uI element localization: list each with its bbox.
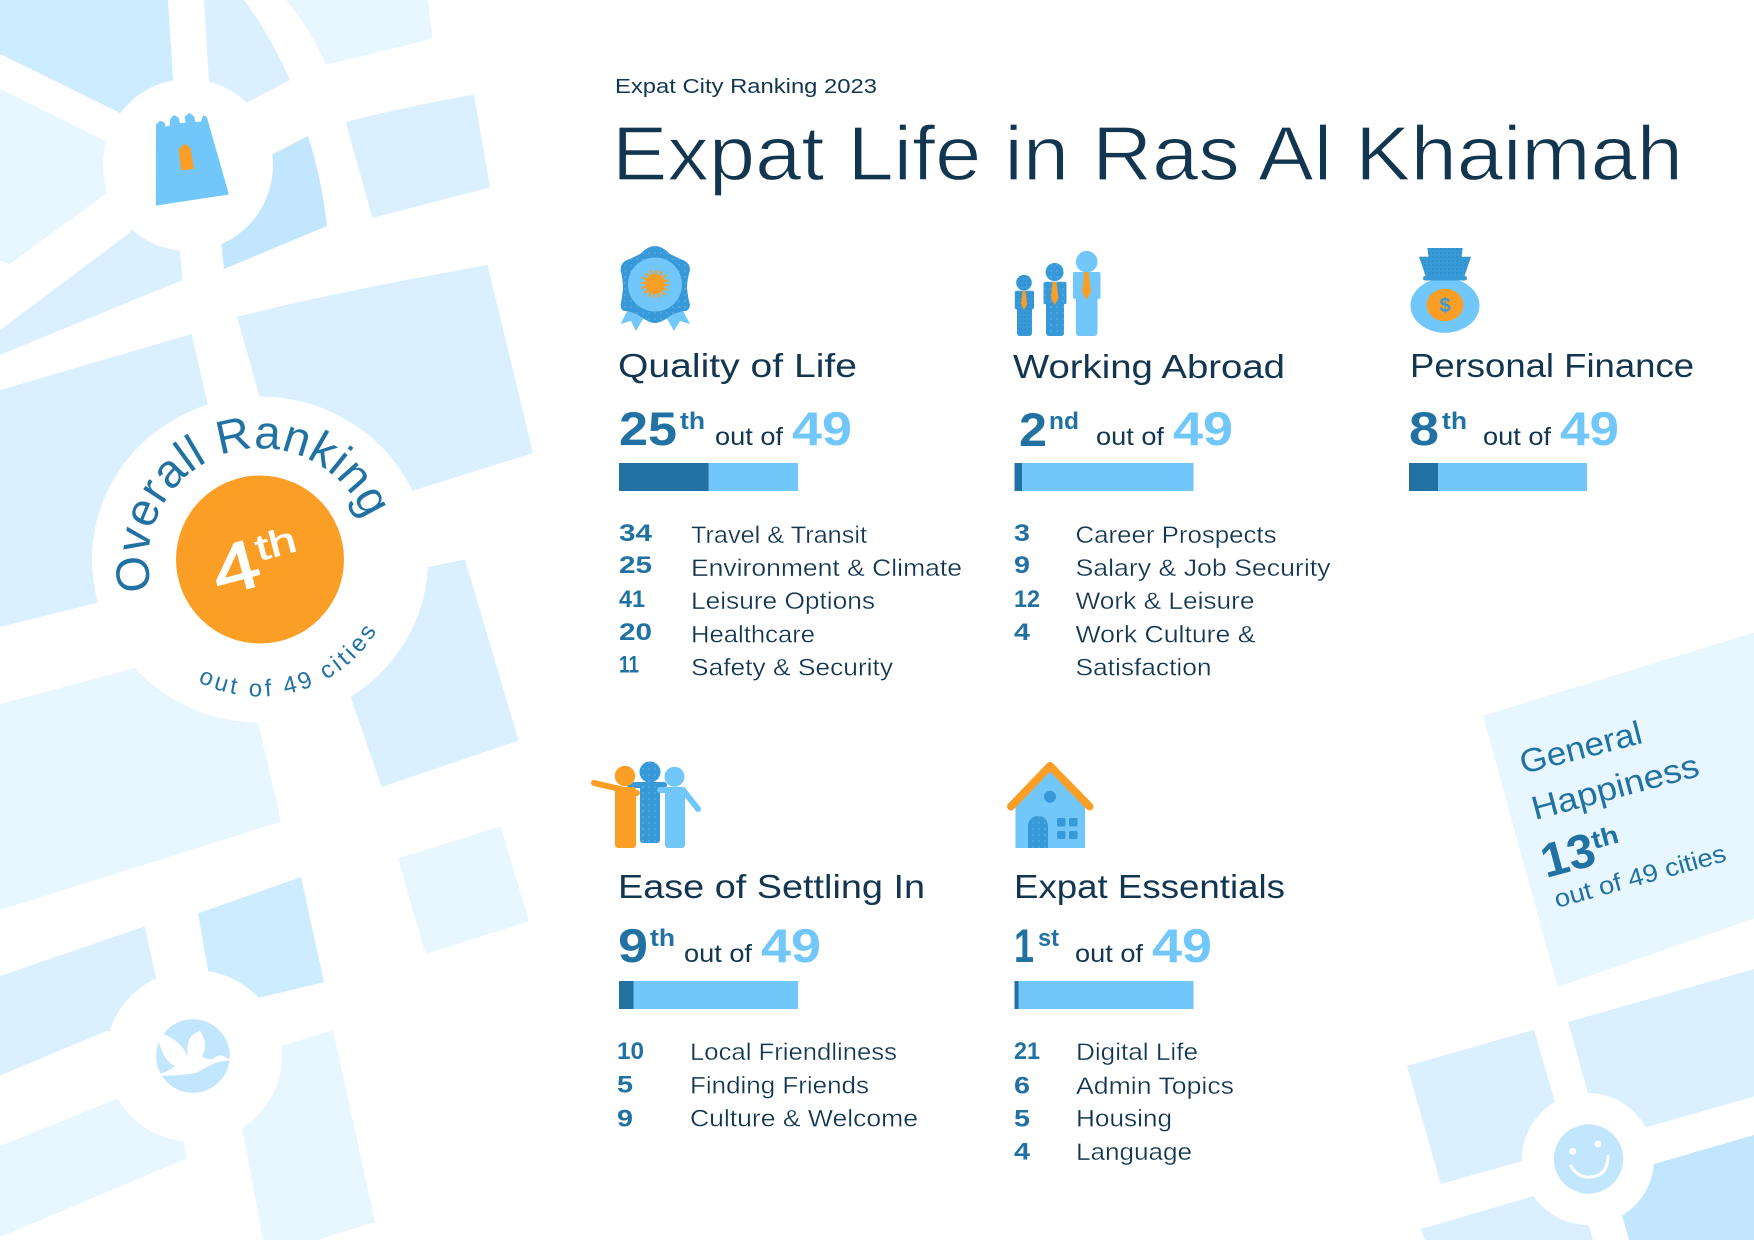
- rank: 9th out of 49: out of: [684, 940, 752, 968]
- sub-rankings list: Work Culture &: [1076, 622, 1256, 648]
- sub-rankings list: Career Prospects: [1076, 522, 1276, 549]
- panel: expat essentials: [1011, 766, 1285, 1166]
- callout: general happiness: Happiness: [1527, 747, 1703, 827]
- rank: 1st out of 49: 1: [1014, 919, 1034, 972]
- icon: smiley face: [1554, 1124, 1623, 1194]
- heading: Ease of Settling In: [618, 868, 925, 905]
- rank: 8th out of 49: [1409, 402, 1619, 455]
- progress bar: [619, 463, 798, 491]
- rank: 9th out of 49: th: [650, 925, 675, 952]
- rank: 2nd out of 49: 2: [1019, 403, 1047, 456]
- panel: quality of life: [618, 246, 962, 682]
- curved caption: out of 49 cities: out of 49 cities: [200, 626, 375, 697]
- sub-rankings list: Salary & Job Security: [1076, 555, 1330, 582]
- rank: 1st out of 49: [1014, 919, 1212, 972]
- sub-rankings list: Finding Friends: [690, 1072, 869, 1100]
- sub-rankings list: 5: [617, 1072, 633, 1098]
- callout: general happiness: 13: [1535, 823, 1601, 889]
- sub-rankings list: 20: [619, 619, 652, 646]
- callout: overall ranking badge: [116, 418, 386, 697]
- sub-rankings list: 4: [1014, 619, 1031, 646]
- heading: Expat Essentials: [1014, 868, 1285, 905]
- icon: house: [1011, 766, 1090, 848]
- sub-rankings list: Leisure Options: [691, 588, 875, 615]
- sub-rankings list: Safety & Security: [691, 654, 893, 682]
- progress bar: [1409, 463, 1587, 491]
- rank: 2nd out of 49: nd: [1049, 408, 1079, 435]
- sub-rankings list: Language: [1076, 1139, 1192, 1166]
- rank: 1st out of 49: st: [1038, 925, 1059, 952]
- sub-rankings list: 34: [619, 520, 653, 547]
- sub-rankings list: 3: [1014, 520, 1030, 547]
- sub-rankings list: 12: [1014, 586, 1040, 613]
- sub-rankings list: [1014, 1038, 1234, 1166]
- orange rank circle: th: [250, 519, 301, 569]
- callout: general happiness: out of 49 cities: [1551, 839, 1729, 914]
- sub-rankings list: Travel & Transit: [691, 522, 867, 549]
- sub-rankings list: [1014, 520, 1330, 682]
- sub-rankings list: Local Friendliness: [690, 1039, 897, 1066]
- icon: three business people: [1015, 251, 1100, 336]
- icon: three friends: [594, 762, 698, 848]
- sub-rankings list: 10: [617, 1038, 644, 1065]
- progress bar: [1014, 981, 1194, 1009]
- panel: working abroad: [1013, 251, 1330, 681]
- sub-rankings list: 4: [1014, 1138, 1031, 1166]
- heading: Personal Finance: [1410, 347, 1694, 384]
- sub-rankings list: Admin Topics: [1076, 1073, 1234, 1100]
- sub-rankings list: 9: [1014, 552, 1030, 579]
- sub-rankings list: [617, 1038, 918, 1132]
- sub-rankings list: Housing: [1076, 1106, 1172, 1132]
- icon: rosette: [621, 246, 690, 331]
- rank: 1st out of 49: 49: [1152, 919, 1212, 972]
- rank: 2nd out of 49: [1019, 402, 1233, 456]
- curved heading: overall ranking: Overall Ranking: [116, 418, 386, 590]
- rank: 25th out of 49: 25: [619, 402, 677, 455]
- sub-rankings list: Satisfaction: [1076, 654, 1212, 682]
- rank: 9th out of 49: 9: [618, 919, 648, 972]
- title: Expat Life in Ras Al Khaimah: [612, 111, 1683, 197]
- rank: 25th out of 49: 49: [792, 402, 852, 455]
- rank: 8th out of 49: th: [1442, 408, 1467, 435]
- icon: money bag: [1410, 248, 1480, 333]
- rank: 2nd out of 49: 49: [1173, 402, 1233, 455]
- callout: general happiness: General: [1515, 714, 1646, 781]
- sub-rankings list: Healthcare: [691, 622, 815, 648]
- rank: 25th out of 49: out of: [715, 423, 783, 451]
- icon: tower landmark: [156, 113, 229, 206]
- sub-rankings list: 21: [1014, 1038, 1040, 1065]
- icon: money bag: $: [1439, 295, 1451, 317]
- heading: Working Abroad: [1013, 348, 1285, 385]
- panel: ease of settling in: [594, 762, 925, 1132]
- sub-rankings list: 25: [619, 552, 652, 579]
- sub-rankings list: 9: [617, 1106, 633, 1132]
- sub-rankings list: Work & Leisure: [1076, 588, 1254, 615]
- rank: 25th out of 49: [619, 402, 852, 455]
- rank: 9th out of 49: [618, 919, 821, 972]
- sub-rankings list: 6: [1014, 1072, 1030, 1100]
- sub-rankings list: 5: [1014, 1106, 1030, 1132]
- orange rank circle: 4: [203, 525, 268, 610]
- rank: 2nd out of 49: out of: [1096, 423, 1164, 451]
- sub-rankings list: Digital Life: [1076, 1039, 1198, 1066]
- rank: 25th out of 49: th: [680, 408, 705, 435]
- callout: general happiness: th: [1588, 821, 1622, 855]
- subtitle: Expat City Ranking 2023: [615, 75, 877, 98]
- callout: general happiness: [1515, 714, 1729, 914]
- sub-rankings list: 41: [619, 586, 645, 613]
- panel: personal finance: [1409, 248, 1694, 491]
- rank: 8th out of 49: 49: [1560, 402, 1619, 455]
- sub-rankings list: Culture & Welcome: [690, 1106, 918, 1132]
- sub-rankings list: [619, 520, 962, 682]
- rank: 1st out of 49: out of: [1075, 940, 1143, 968]
- progress bar: [619, 981, 798, 1009]
- heading: Quality of Life: [618, 347, 857, 384]
- sub-rankings list: Environment & Climate: [691, 555, 962, 582]
- rank: 8th out of 49: out of: [1483, 423, 1551, 451]
- rank: 8th out of 49: 8: [1409, 402, 1439, 455]
- rank: 9th out of 49: 49: [761, 919, 821, 972]
- orange rank circle: [176, 476, 344, 644]
- icon: flying bird logo: [155, 1019, 231, 1093]
- sub-rankings list: 11: [619, 652, 639, 678]
- progress bar: [1014, 463, 1194, 491]
